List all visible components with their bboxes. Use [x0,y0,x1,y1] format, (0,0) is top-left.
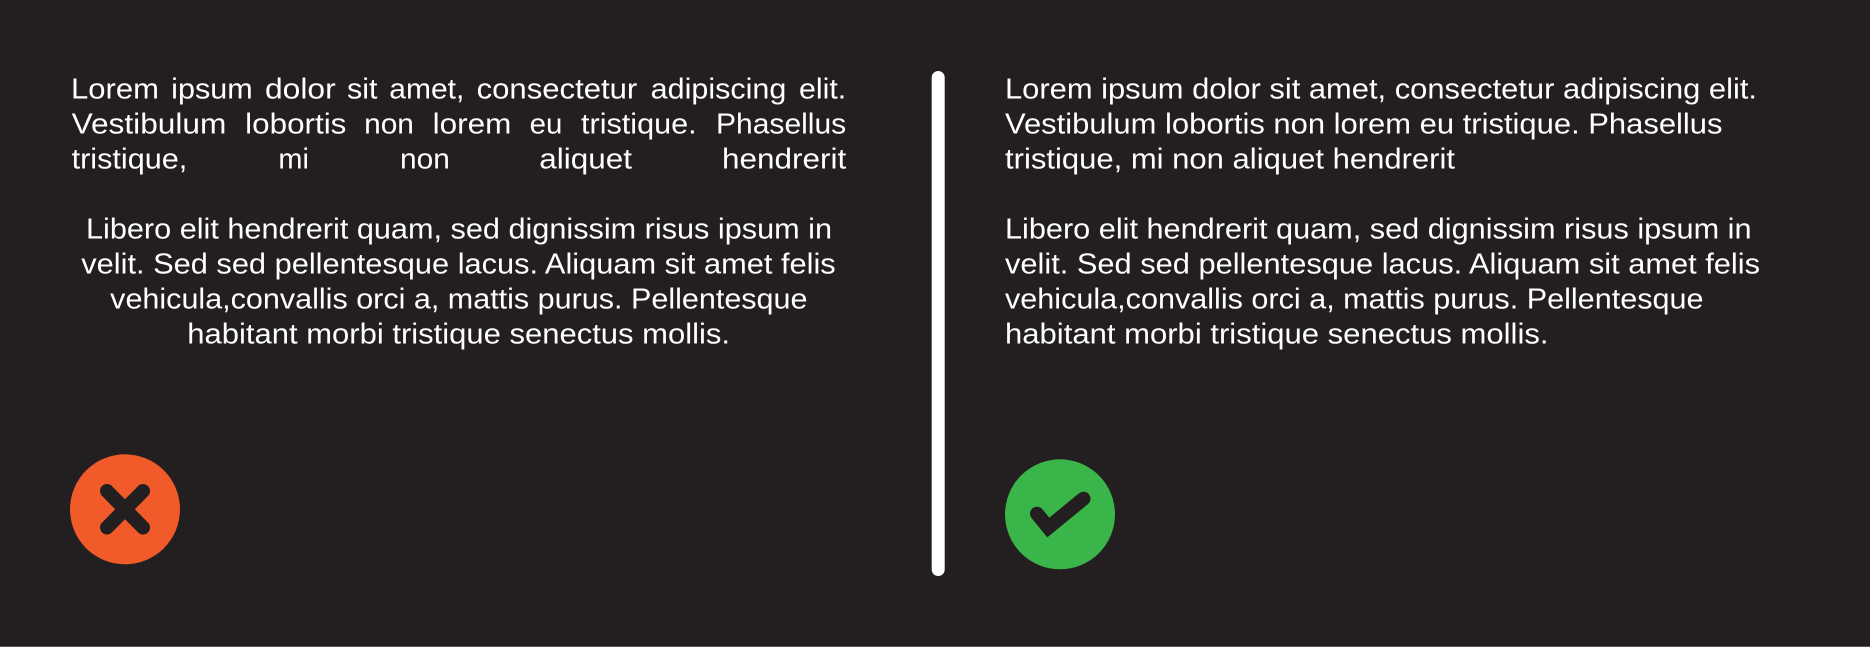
text block: justified paragraph: tristique, [72,143,187,175]
text block: justified paragraph: Vestibulum [72,108,226,140]
text block: left-aligned paragraph one: tristique, mi non aliquet hendrerit [1005,143,1455,175]
panel: right (correct example) [1005,73,1760,569]
text block: justified paragraph: sit [347,73,378,105]
text block: centered paragraph [81,213,836,350]
text block: justified paragraph: ipsum [171,73,253,105]
text block: justified paragraph: aliquet [539,143,632,175]
text block: centered paragraph: velit. Sed sed pellentesque lacus. Aliquam sit amet felis [81,248,836,280]
text block: centered paragraph: habitant morbi tristique senectus mollis. [187,318,730,350]
text block: left-aligned paragraph one [1005,73,1757,175]
text block: justified paragraph: elit. [799,73,846,105]
text block: justified paragraph: amet, [389,73,464,105]
text block: justified paragraph: consectetur [477,73,638,105]
text block: justified paragraph: Phasellus [716,108,846,140]
text block: justified paragraph: non [400,143,450,175]
divider [932,71,945,576]
text block: justified paragraph: tristique. [581,108,697,140]
text block: justified paragraph: eu [530,108,562,140]
text block: justified paragraph: non [364,108,414,140]
text block: left-aligned paragraph one: Vestibulum lobortis non lorem eu tristique. Phasellus [1005,108,1722,140]
text block: left-aligned paragraph two [1005,213,1760,350]
text block: justified paragraph: adipiscing [651,73,786,105]
icon: orange cross [70,454,180,564]
panel: left (wrong example) [70,73,846,564]
text block: justified paragraph: mi [278,143,309,175]
text block: left-aligned paragraph two: vehicula,convallis orci a, mattis purus. Pellentesque [1005,283,1704,315]
text block: justified paragraph: dolor [265,73,336,105]
text block: left-aligned paragraph two: habitant morbi tristique senectus mollis. [1005,318,1548,350]
text block: justified paragraph: lobortis [245,108,346,140]
text block: justified paragraph: hendrerit [722,143,846,175]
text block: left-aligned paragraph one: Lorem ipsum dolor sit amet, consectetur adipiscing elit. [1005,73,1757,105]
text block: justified paragraph: lorem [433,108,511,140]
text block: justified paragraph: Lorem [71,73,159,105]
text block: left-aligned paragraph two: velit. Sed sed pellentesque lacus. Aliquam sit amet felis [1005,248,1760,280]
text block: centered paragraph: Libero elit hendrerit quam, sed dignissim risus ipsum in [86,213,832,245]
icon: green check mark [1005,459,1115,569]
text block: left-aligned paragraph two: Libero elit hendrerit quam, sed dignissim risus ipsum in [1005,213,1752,245]
text block: centered paragraph: vehicula,convallis orci a, mattis purus. Pellentesque [110,283,807,315]
text block: justified paragraph [71,73,846,175]
